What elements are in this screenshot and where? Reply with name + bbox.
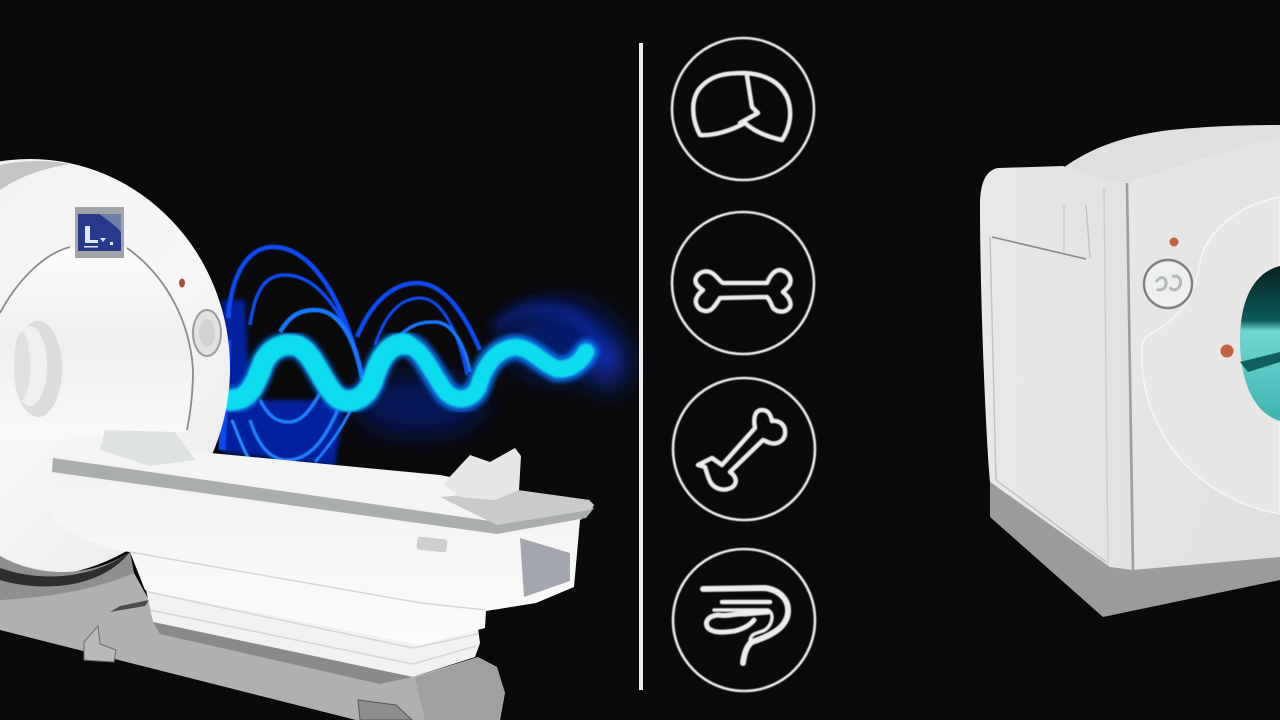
icon: intestine — [673, 549, 815, 691]
gantry inner face — [0, 247, 193, 440]
MRI scanner gantry — [0, 159, 230, 577]
patient table — [0, 430, 594, 720]
icon: diagonal bone — [673, 378, 815, 520]
table body — [52, 470, 585, 645]
vertical divider — [639, 43, 643, 690]
CT scanner top cover — [1063, 125, 1280, 190]
CT scanner logo badge — [1144, 260, 1192, 308]
table logo — [416, 536, 448, 553]
CT scanner — [980, 125, 1280, 617]
blue electromagnetic wave — [222, 247, 626, 466]
foot cushion — [443, 448, 521, 500]
CT scanner front face — [1127, 137, 1280, 570]
gantry top grey band — [0, 161, 70, 190]
icon: horizontal bone — [672, 212, 814, 354]
gantry shadow foot — [0, 552, 134, 600]
CT scanner side panel — [980, 166, 1133, 570]
head cushion — [100, 430, 195, 466]
CT scanner bore — [1240, 266, 1280, 421]
table right slab — [440, 490, 594, 525]
gantry display screen — [75, 207, 124, 258]
scanner bore — [13, 321, 62, 417]
table end opening — [520, 538, 570, 597]
CT scanner ring — [1142, 197, 1280, 514]
table top surface — [54, 440, 594, 530]
icon: lungs or organ — [672, 38, 814, 180]
table grey edge strip — [52, 458, 594, 534]
gantry control dial — [193, 310, 221, 356]
CT scanner indicator lights — [1170, 238, 1234, 358]
table pedestal — [145, 585, 480, 677]
gantry indicator light — [179, 278, 185, 288]
table base rails — [0, 573, 505, 720]
CT scanner base — [990, 482, 1280, 617]
